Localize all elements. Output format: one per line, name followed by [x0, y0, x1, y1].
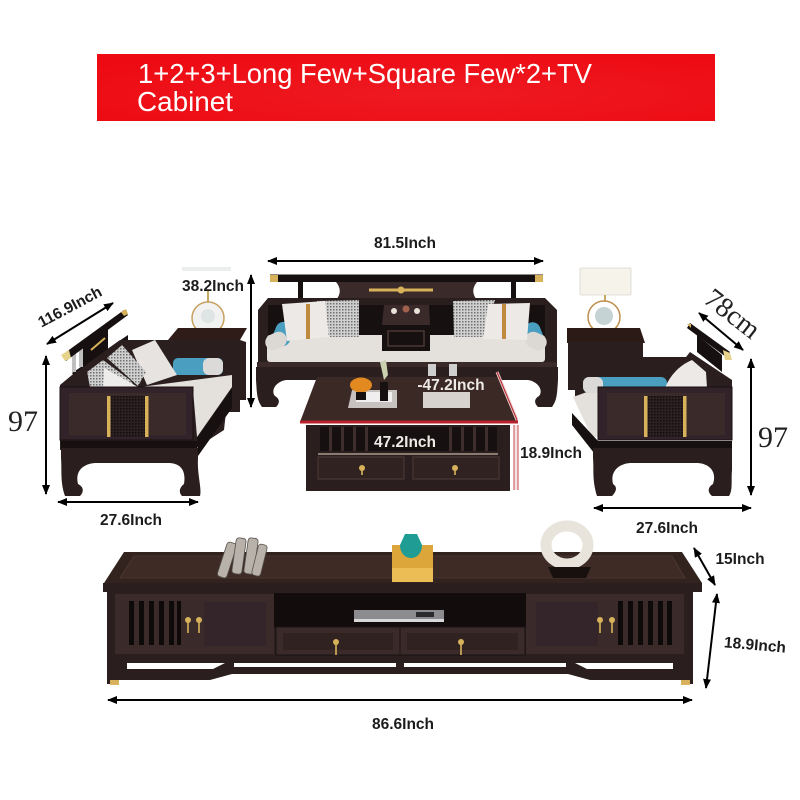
left side table and lamp — [168, 267, 247, 400]
dimension: left chair width: 27.6Inch — [100, 512, 162, 529]
icon: DVD player — [354, 610, 444, 622]
icon: sofa left cushions — [263, 300, 359, 353]
cabinet base frame — [107, 657, 693, 684]
dimension: coffee table width: 47.2Inch — [374, 434, 436, 451]
icon: tray with flowers — [348, 360, 397, 408]
dimension: left chair height: 97 — [8, 405, 38, 438]
three-seat sofa — [256, 274, 558, 407]
icon: sofa right cushions — [453, 300, 549, 353]
icon: white ring sculpture — [546, 526, 591, 578]
dimension: right chair width: 27.6Inch — [636, 520, 698, 537]
title banner: Cabinet — [137, 86, 233, 117]
icon: right chair bolster — [583, 377, 667, 393]
icon: rolled scrolls — [217, 537, 268, 579]
icon: right chair pillow — [665, 360, 707, 388]
icon: left chair backrest — [61, 309, 128, 385]
icon: clear box — [423, 392, 470, 408]
right single sofa — [572, 323, 732, 496]
dimension: right chair height: 97 — [758, 421, 788, 454]
dimension: left chair width — [58, 502, 198, 529]
icon: brass handles — [185, 617, 615, 655]
TV cabinet — [103, 526, 702, 685]
dimension: left chair height — [8, 356, 46, 494]
dimension: cabinet height: 18.9Inch — [723, 634, 787, 657]
title banner — [97, 54, 715, 121]
icon: glass jars — [428, 364, 457, 376]
icon: right chair backrest — [687, 323, 732, 372]
dimension: cabinet width: 86.6Inch — [372, 716, 434, 733]
red dimension lines — [300, 372, 518, 490]
icon: left chair pillows — [87, 340, 177, 387]
dimension: sofa height: 38.2Inch — [182, 278, 244, 295]
dimension: right chair height — [751, 359, 788, 495]
left single sofa — [60, 309, 240, 496]
icon: left chair bolster — [173, 358, 223, 375]
icon: right door grid — [618, 601, 672, 645]
coffee table — [300, 360, 518, 491]
dimension: sofa width: 81.5Inch — [374, 235, 436, 252]
dimension: sofa height — [182, 275, 251, 407]
dimension: left chair depth: 116.9Inch — [35, 284, 105, 331]
dimension: cabinet height — [706, 594, 787, 688]
dimension: cabinet depth — [694, 548, 765, 585]
icon: yellow box with teal jar — [392, 534, 433, 582]
dimension: coffee table height: 18.9Inch — [520, 445, 582, 462]
icon: tea table on sofa — [382, 305, 430, 351]
dimension: cabinet depth: 15Inch — [715, 551, 765, 568]
dimension: right chair depth: 78cm — [698, 283, 766, 346]
right side table and lamp — [567, 268, 645, 390]
title banner: 1+2+3+Long Few+Square Few*2+TV — [138, 58, 592, 89]
dimension: coffee table depth: -47.2Inch — [417, 377, 485, 394]
icon: left door grid — [129, 601, 181, 645]
